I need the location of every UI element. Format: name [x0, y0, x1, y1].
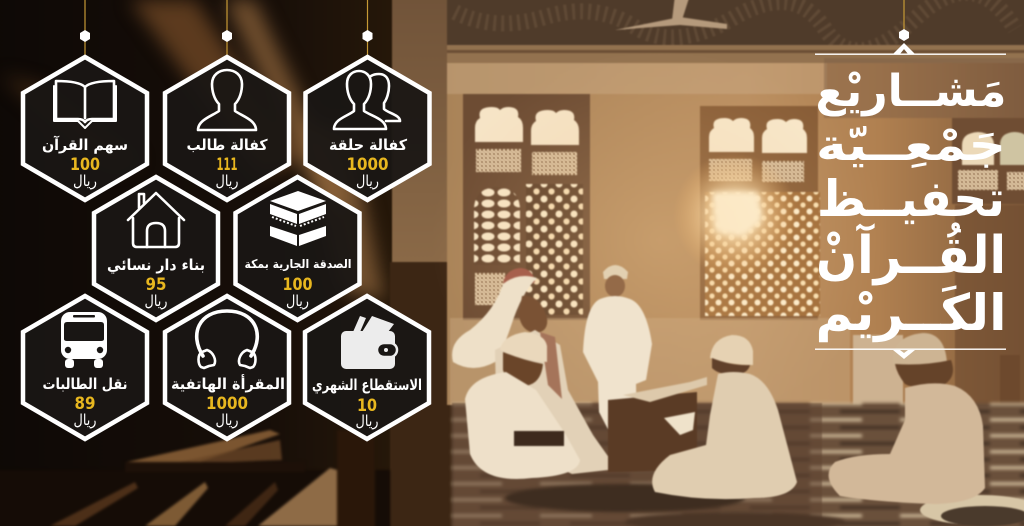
- icon: bus: [61, 312, 107, 368]
- card: students' transport: [23, 296, 147, 439]
- currency: ريال: [74, 411, 96, 429]
- title bottom ornament: [815, 348, 1006, 359]
- pillar: [392, 0, 447, 526]
- amount: 100: [282, 275, 313, 295]
- icon: headphones: [197, 311, 257, 368]
- amount: 100: [70, 155, 100, 175]
- card: monthly deduction: [305, 296, 429, 439]
- title line 3: تحفيــظ: [817, 170, 1005, 228]
- reading boy right: [829, 333, 985, 504]
- name: كفالة طالب: [186, 136, 268, 154]
- pillar base: [390, 262, 452, 526]
- icon: wallet: [341, 316, 397, 369]
- name: كفالة حلقة: [329, 136, 407, 154]
- window right with sun: [673, 106, 820, 320]
- mosque wall: [447, 60, 1024, 405]
- ceiling fan: [615, 0, 727, 30]
- ceiling frieze: [447, 0, 1024, 63]
- amount: 89: [74, 394, 96, 414]
- upper wall light band: [447, 62, 827, 94]
- name: الصدقة الجارية بمكة: [244, 257, 352, 271]
- name: الاستقطاع الشهري: [312, 376, 422, 395]
- title hanging ornament: [815, 0, 1006, 55]
- lectern with book: [608, 377, 707, 472]
- card: charity in Makkah: [236, 177, 360, 320]
- hanging line: second column: [222, 0, 232, 57]
- currency: ريال: [356, 172, 379, 190]
- card: phone recitation: [165, 296, 289, 439]
- name: المقرأة الهاتفية: [171, 374, 285, 393]
- card: circle sponsorship: [306, 57, 430, 200]
- hanging line: third column: [362, 0, 372, 57]
- icon: Kaaba: [270, 191, 326, 246]
- carpet floor: [452, 403, 1024, 526]
- hanging line: first column: [80, 0, 90, 57]
- card: student sponsorship: [165, 57, 289, 200]
- amount: 1000: [346, 155, 389, 175]
- title line 1: مَشــاريْع: [816, 66, 1006, 117]
- icon: open book: [54, 81, 116, 128]
- amount: 95: [146, 275, 166, 295]
- currency: ريال: [356, 412, 378, 430]
- amount: 1000: [206, 394, 248, 414]
- currency: ريال: [216, 411, 238, 429]
- currency: ريال: [144, 292, 168, 310]
- right window and upper wall: [824, 58, 1024, 405]
- name: بناء دار نسائي: [107, 256, 205, 274]
- currency: ريال: [73, 172, 97, 190]
- card: women's house: [94, 177, 218, 320]
- icon: house: [128, 193, 184, 247]
- wooden pews foreground: [0, 430, 390, 526]
- currency: ريال: [216, 172, 238, 190]
- title block: [815, 0, 1006, 359]
- name: نقل الطالبات: [42, 375, 128, 393]
- reading boy left: [465, 332, 580, 479]
- window left: [463, 94, 590, 320]
- card: Quran share: [23, 57, 147, 200]
- light haze: [430, 50, 890, 430]
- amount: 10: [357, 396, 377, 416]
- title line 2: جَمْعِــيّة: [816, 120, 1006, 171]
- title line 4: القُــرآنْ: [816, 222, 1006, 286]
- name: سهم القرآن: [42, 136, 128, 154]
- standing boy: [583, 265, 652, 437]
- icon: two people: [334, 71, 400, 129]
- icon: person: [198, 70, 256, 130]
- title line 5: الكَــريْم: [816, 284, 1006, 343]
- currency: ريال: [286, 292, 309, 310]
- left dark hall with light streaks: [0, 0, 392, 526]
- reading boy centre: [652, 335, 797, 499]
- man with ghutra: [452, 268, 617, 474]
- wall dado: [450, 318, 850, 405]
- amount: 111: [216, 155, 238, 175]
